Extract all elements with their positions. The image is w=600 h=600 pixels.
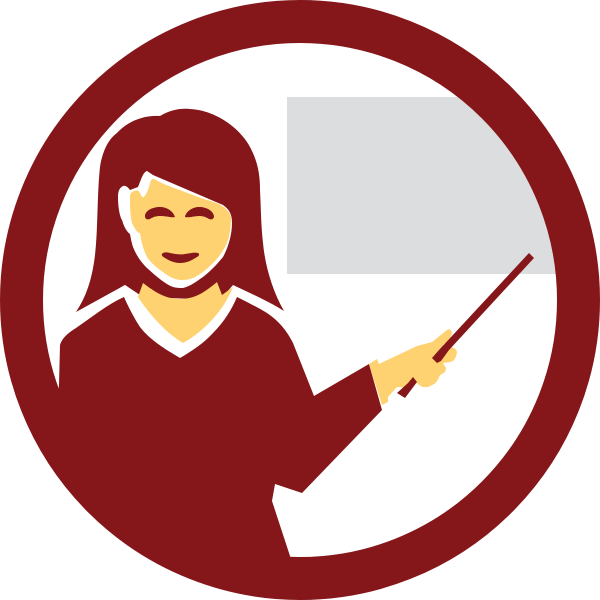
hand xyxy=(369,329,457,405)
hair xyxy=(76,109,284,312)
face xyxy=(130,179,231,280)
right eye xyxy=(185,207,214,219)
neck xyxy=(138,282,233,343)
face backing white xyxy=(118,171,232,288)
presentation board xyxy=(287,97,556,274)
mouth xyxy=(162,252,199,263)
left eye xyxy=(145,207,175,219)
collar white xyxy=(120,285,284,311)
teacher figure xyxy=(58,108,534,557)
stick upper xyxy=(432,253,534,363)
pointer stick xyxy=(397,253,534,398)
body with sleeve xyxy=(58,297,382,557)
stick lower xyxy=(397,377,417,398)
